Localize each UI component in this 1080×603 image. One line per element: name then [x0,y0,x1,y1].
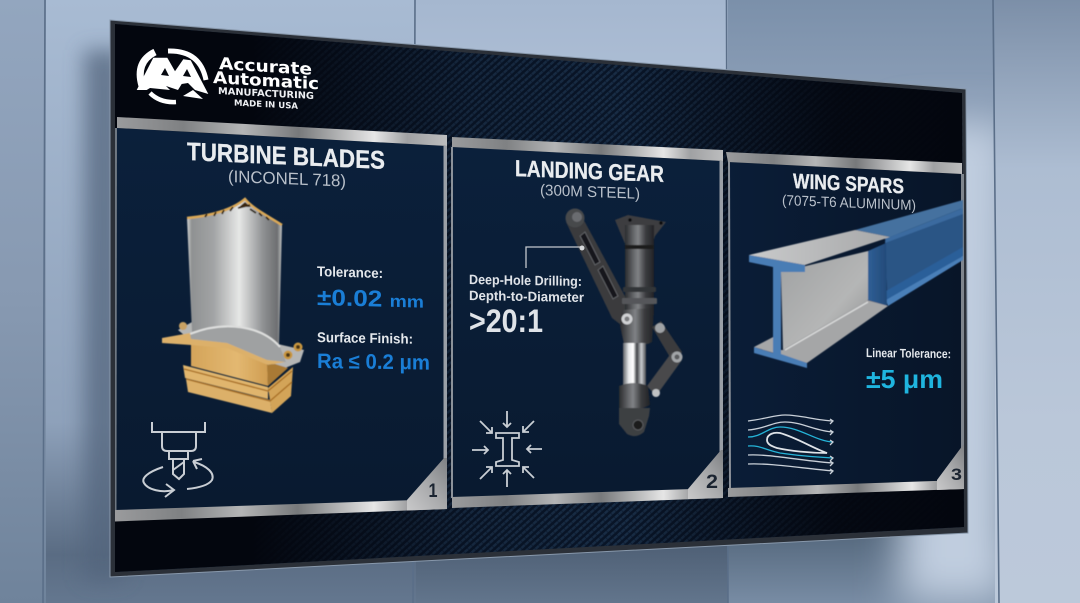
logo wordmark: Manufacturing: MANUFACTURING [218,86,314,102]
panel 2 silver frame [451,137,723,508]
subheading: 300M steel: (300M STEEL) [540,182,640,203]
I-beam wing spar illustration [749,200,963,368]
subheading: 7075-T6 aluminum: (7075-T6 ALUMINUM) [782,193,916,214]
deep-hole drilling label [469,272,585,305]
deep-hole drilling label: Deep-Hole Drilling: [469,272,582,289]
panel 1 background [115,128,445,511]
silver lower flange [754,300,888,363]
tolerance label: Tolerance: [317,263,383,281]
heading: turbine blades: TURBINE BLADES [187,138,385,175]
surface finish label: Surface Finish: [317,329,413,347]
heading: wing spars: WING SPARS [793,170,904,198]
platform back with mounting tabs [178,322,304,368]
callout leader line [526,246,584,268]
company logo [137,51,319,112]
panel 3 background [728,162,963,488]
torque links [652,321,682,364]
logo wordmark: Made in USA: MADE IN USA [234,99,298,112]
mounting flange [615,215,666,246]
panel 3: wing spars [726,152,964,497]
panel 3 corner tab with number: 3 [951,465,962,484]
icon: I-beam under compression [472,411,542,487]
panel 2 corner tab with number: 2 [706,472,718,493]
turbine blade illustration [162,199,304,413]
main cylinder [625,225,654,315]
blue section top flange [855,200,963,237]
heading: landing gear: LANDING GEAR [515,155,664,187]
axle eye [619,408,650,436]
logo wordmark: Accurate: Accurate [219,54,312,79]
icon: milling tool with rotation arrows [143,422,213,497]
dovetail right face [268,367,293,413]
root block front face [191,343,268,386]
panel 1 corner tab with number [407,458,447,510]
linear tolerance label: Linear Tolerance: [866,346,951,361]
panel 2 corner tab with number [688,450,723,499]
platform front edge [162,333,285,365]
screen carbon-fibre background [115,24,964,572]
panel 1 silver frame [115,117,447,522]
silver web side [781,251,868,350]
blue section web [885,212,963,291]
deep-hole drilling label: Depth-to-Diameter [469,288,585,305]
blue section lower flange [886,247,963,301]
blue end profile [749,255,807,368]
lower collar [619,383,650,410]
linear tolerance value: ±5 μm [866,364,943,394]
dovetail front layers [183,365,268,399]
cooling channels at blade tip [187,199,282,225]
subheading: inconel 718: (INCONEL 718) [228,167,346,191]
logo mark [137,51,208,102]
depth ratio value: >20:1 [469,303,543,339]
silver top flange [749,230,890,265]
panel 1: turbine blades [115,117,447,522]
blade fillet [190,326,286,362]
lower housing [620,308,654,344]
root block side face [267,364,288,386]
blade airfoil [187,199,282,345]
chrome piston [623,343,646,388]
logo wordmark: Automatic: Automatic [213,68,319,93]
panel 2: landing gear [451,137,723,508]
panel 1 corner tab with number: 1 [428,481,438,502]
tolerance value: ±0.02 mm [317,284,424,313]
panel 3 silver frame [726,152,964,497]
panel 3 corner tab with number [937,445,964,490]
drag arm [566,213,634,335]
surface finish value: Ra ≤ 0.2 μm [317,350,430,375]
monitor frame [110,20,968,577]
cut web face [868,243,887,306]
landing gear strut illustration [566,208,682,436]
icon: airfoil with flow lines [748,415,833,474]
panel 2 background [453,147,721,498]
